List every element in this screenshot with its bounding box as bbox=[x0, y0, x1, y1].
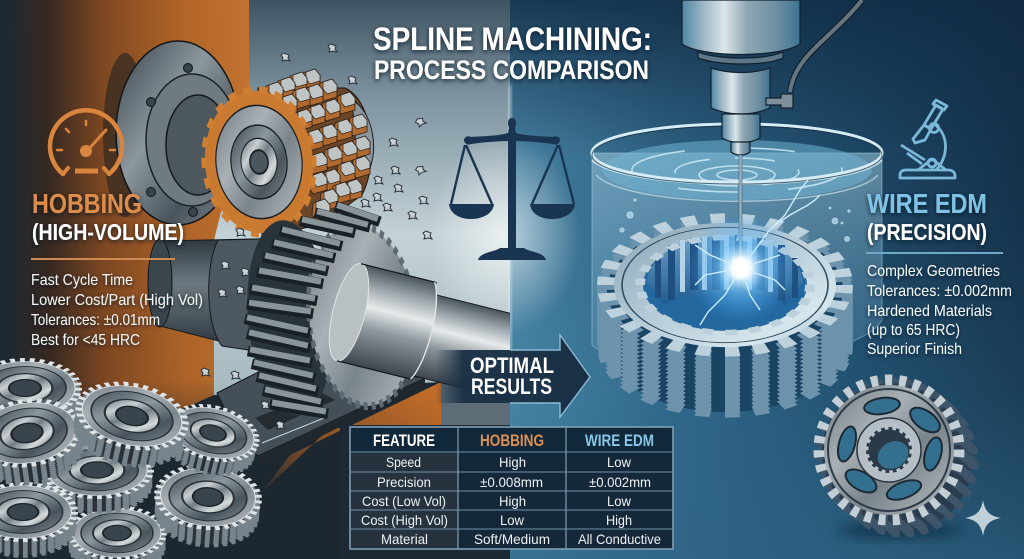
lower floor area bbox=[0, 382, 510, 559]
main shaft bbox=[414, 294, 510, 388]
wire EDM feature list: (up to 65 HRC) bbox=[867, 322, 960, 339]
icon: speedometer bbox=[50, 110, 122, 174]
table frame bbox=[350, 427, 673, 549]
arrow label: OPTIMAL bbox=[470, 353, 554, 378]
table header: HOBBING bbox=[480, 431, 544, 450]
table header bbox=[373, 431, 654, 450]
hobbing feature list: Fast Cycle Time bbox=[31, 272, 133, 289]
metal chips bbox=[201, 44, 432, 429]
spindle collar bbox=[698, 52, 783, 64]
background: wire EDM blue panel bbox=[510, 0, 1024, 559]
centre glow bbox=[430, 135, 580, 335]
title bbox=[373, 21, 652, 85]
spline bore walls bbox=[647, 235, 803, 305]
arrow: optimal results bbox=[435, 335, 590, 417]
table rows: ±0.002mm bbox=[589, 474, 651, 490]
wire EDM feature list: Hardened Materials bbox=[867, 303, 992, 320]
table rows: Soft/Medium bbox=[474, 531, 550, 547]
table header: FEATURE bbox=[373, 431, 435, 450]
pile of finished gears bbox=[0, 360, 262, 559]
heading: wire EDM: WIRE EDM bbox=[867, 188, 987, 219]
glass tank rim bbox=[592, 124, 882, 201]
subheading: high-volume: (HIGH-VOLUME) bbox=[32, 219, 184, 245]
table rows: Speed bbox=[386, 454, 421, 470]
coolant hose bbox=[790, 0, 862, 92]
gear side teeth bbox=[822, 383, 972, 531]
hobbing feature list: Tolerances: ±0.01mm bbox=[31, 312, 160, 329]
spline gear hull bbox=[240, 217, 340, 419]
wire EDM feature list: Superior Finish bbox=[867, 341, 962, 358]
spindle nozzle bbox=[722, 114, 760, 142]
gear hub bbox=[857, 418, 921, 482]
spline gear face bbox=[300, 219, 424, 411]
left shaft section bbox=[148, 238, 300, 352]
spline teeth bars bbox=[250, 206, 375, 413]
title: PROCESS COMPARISON bbox=[374, 55, 649, 85]
gear top face bbox=[607, 219, 843, 351]
orange machine wall bbox=[0, 0, 249, 559]
table rows: Precision bbox=[377, 474, 431, 490]
spindle head bbox=[682, 0, 862, 265]
icon: balance scales bbox=[449, 118, 575, 260]
heading: hobbing: HOBBING bbox=[32, 188, 142, 219]
table header: WIRE EDM bbox=[585, 431, 654, 450]
table rows: All Conductive bbox=[578, 531, 661, 547]
hobbing feature list bbox=[31, 272, 203, 349]
hob teeth rows bbox=[265, 69, 370, 221]
tank body bbox=[592, 153, 882, 363]
background: hobbing steel wall bbox=[0, 0, 510, 559]
spindle body bbox=[682, 0, 800, 54]
hob cutter bbox=[198, 69, 374, 239]
divider bbox=[31, 258, 175, 260]
divider bbox=[866, 252, 1003, 254]
comparison table bbox=[350, 427, 673, 549]
table rows: High bbox=[606, 512, 632, 528]
bubbles bbox=[620, 199, 850, 242]
finished spline gear bbox=[820, 381, 972, 539]
table rows bbox=[361, 454, 661, 547]
hobbing feature list: Lower Cost/Part (High Vol) bbox=[31, 292, 203, 309]
shaft collar bbox=[328, 263, 438, 380]
spindle neck bbox=[711, 68, 770, 114]
hob body bbox=[258, 88, 372, 236]
table rows: Low bbox=[607, 493, 632, 509]
wire EDM feature list: Complex Geometries bbox=[867, 263, 1000, 280]
glass tank with dielectric fluid bbox=[592, 140, 882, 363]
subheading: precision: (PRECISION) bbox=[867, 219, 987, 245]
hobbing panel bbox=[31, 110, 203, 349]
EDM wire bbox=[739, 155, 742, 265]
table rows: High bbox=[499, 454, 526, 470]
ripples bbox=[632, 148, 842, 192]
spline bore inner teeth bbox=[640, 237, 810, 333]
machine bench bbox=[217, 362, 425, 466]
water surface bbox=[602, 140, 872, 200]
hose fitting bbox=[766, 94, 793, 108]
gear side walls bbox=[607, 224, 843, 412]
hobbing feature list: Best for <45 HRC bbox=[31, 332, 140, 349]
arrow label: RESULTS bbox=[471, 374, 552, 399]
spline workpiece shaft bbox=[148, 206, 557, 419]
table rows: Low bbox=[607, 454, 632, 470]
centre seam bbox=[508, 85, 512, 385]
table rows: Cost (High Vol) bbox=[361, 512, 448, 528]
icon: microscope bbox=[900, 100, 955, 178]
wire EDM panel bbox=[866, 100, 1012, 358]
table rows: ±0.008mm bbox=[480, 474, 543, 490]
hob face bbox=[198, 85, 320, 239]
wire EDM feature list: Tolerances: ±0.002mm bbox=[867, 283, 1012, 300]
title: SPLINE MACHINING: bbox=[373, 21, 652, 57]
gear web holes bbox=[835, 396, 945, 504]
table rows: Material bbox=[381, 531, 428, 547]
table rows: Low bbox=[500, 512, 525, 528]
table rows: High bbox=[499, 493, 526, 509]
main shaft and collar bbox=[328, 263, 510, 388]
hob arbor flange bbox=[103, 41, 240, 225]
arrow body bbox=[435, 335, 590, 417]
gear face bbox=[820, 381, 958, 519]
table rows: Cost (Low Vol) bbox=[362, 493, 446, 509]
wire EDM feature list bbox=[867, 263, 1012, 358]
icon: sparkle bbox=[965, 500, 1001, 536]
wire EDM spline gear bbox=[607, 219, 843, 412]
electric spark and lightning bbox=[686, 180, 820, 325]
gear shadow bbox=[838, 521, 962, 539]
arrow label bbox=[470, 353, 554, 399]
